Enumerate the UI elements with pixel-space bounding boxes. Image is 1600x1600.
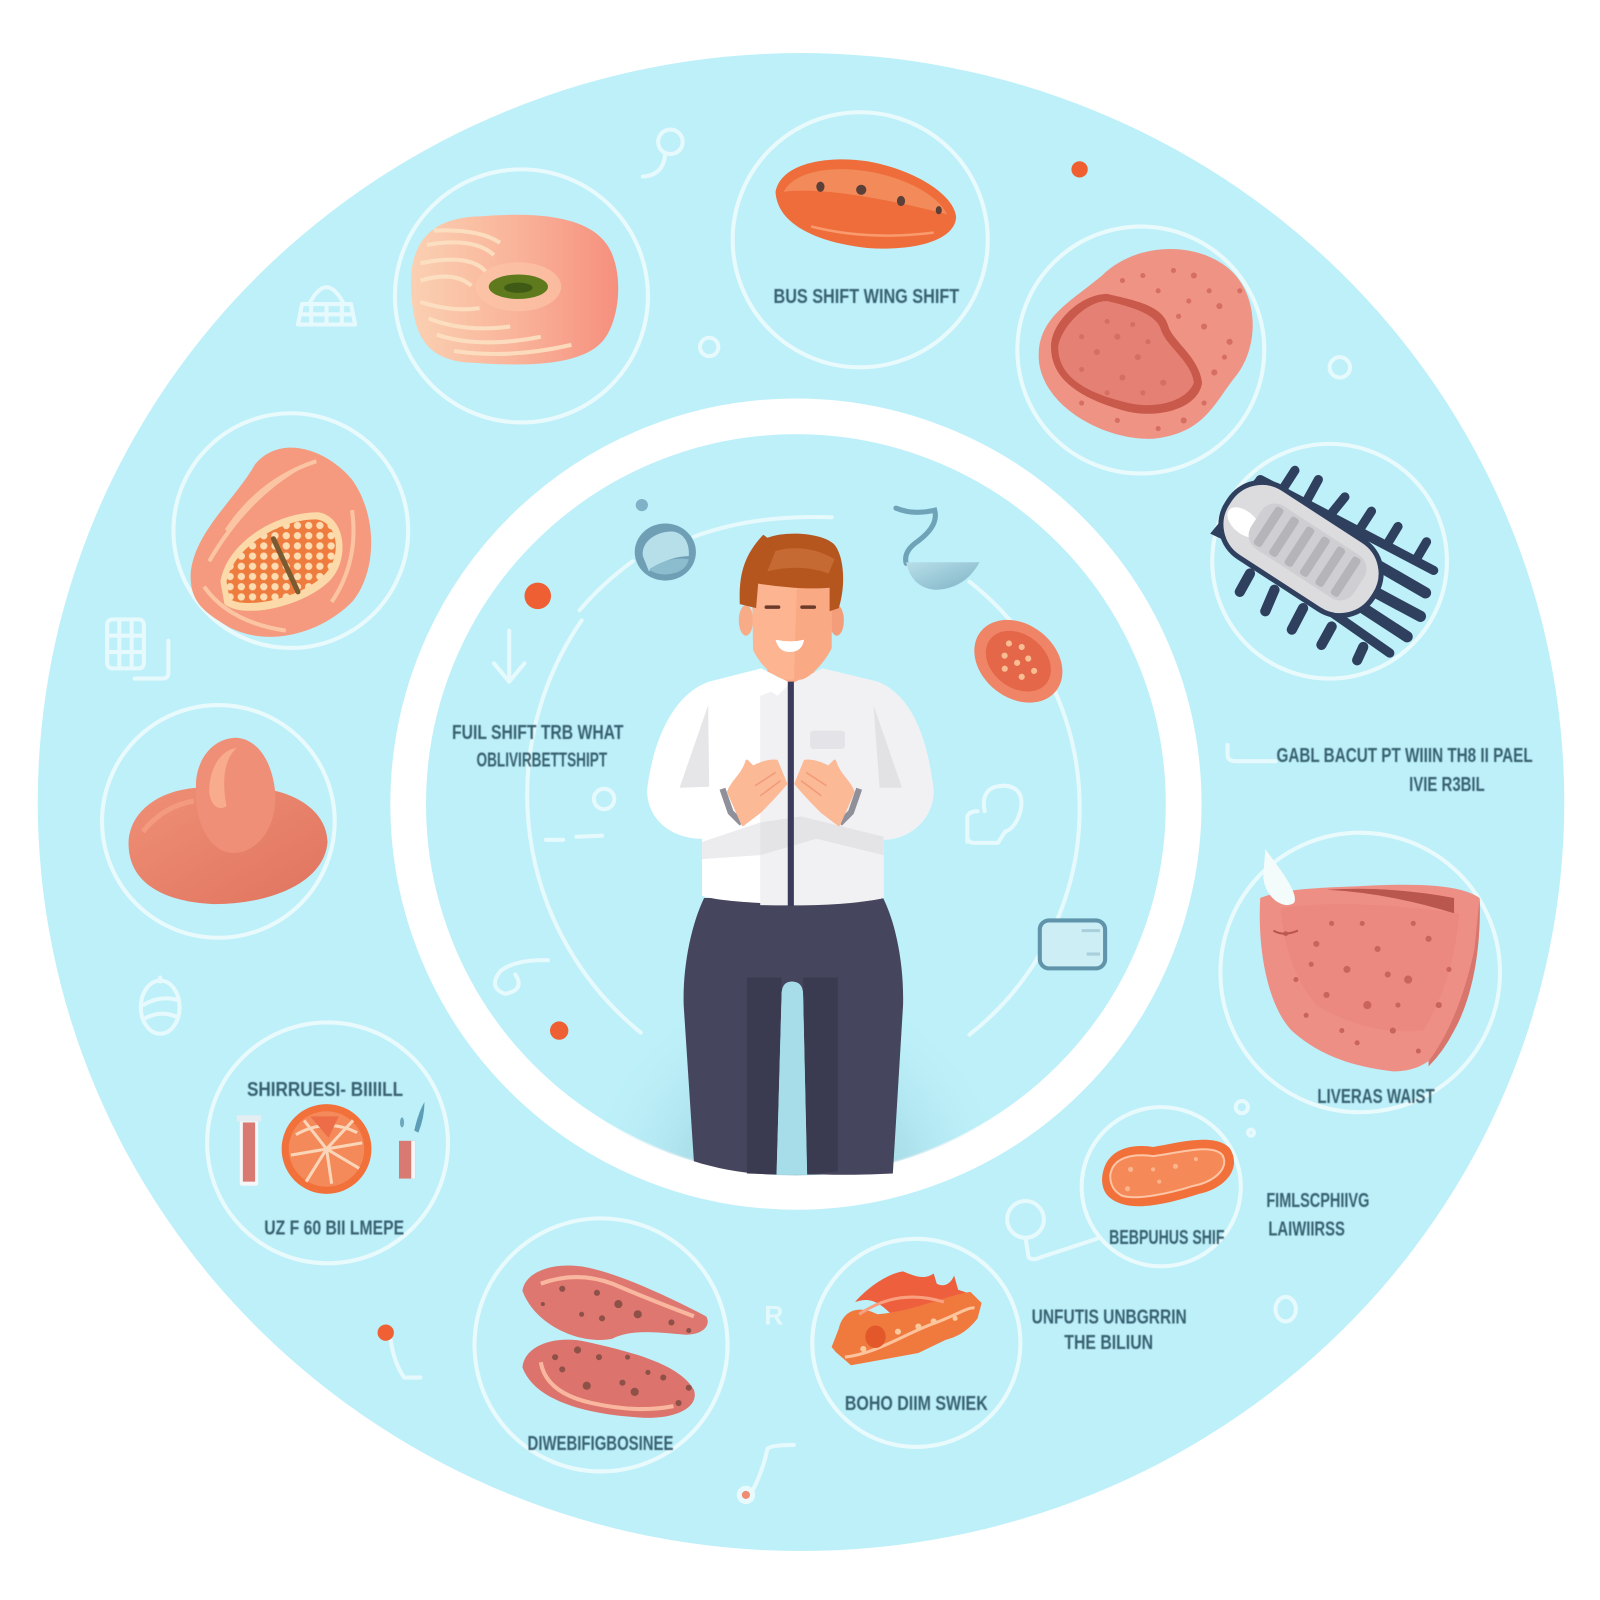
icon: pin bottom: [737, 1445, 794, 1504]
icon: left tube: [237, 1115, 261, 1186]
organ: mound: [129, 738, 328, 904]
text block: lower centre: [1032, 1306, 1187, 1354]
text block: centre left: OBLIVIRBETTSHIPT: [477, 749, 608, 771]
icon: hook bowl: [896, 508, 980, 590]
head: [739, 534, 844, 680]
icon: bubbles right bottom: [1236, 1101, 1254, 1136]
icon: orange pin lower left: [378, 1324, 420, 1378]
floor shadow: [610, 1086, 982, 1176]
person: [610, 534, 982, 1176]
icon: oval ring: [1276, 1297, 1296, 1321]
icon: orange dot: [524, 583, 551, 609]
neck: [767, 653, 814, 696]
text block: right: IVIE R3BIL: [1409, 774, 1485, 796]
inner leg shading: [747, 978, 838, 1174]
panel: mound organ: [102, 705, 335, 938]
decorative icons outer ring: [107, 130, 1350, 1504]
label bottom: UZ F 60 BII LMEPE: [264, 1218, 404, 1240]
text block: lower right: [1266, 1190, 1369, 1241]
panel: top left organ: [395, 169, 648, 422]
leg gap: [777, 982, 807, 1174]
mouth: [776, 640, 804, 652]
icon: grid chart: [107, 619, 168, 679]
label: DIWEBIFIGBOSINEE: [528, 1433, 673, 1455]
organ: round slice: [282, 1104, 371, 1194]
icon: letter: R: [764, 1300, 783, 1330]
text block: right: [1277, 745, 1533, 796]
icon: dashes: [546, 836, 602, 840]
organ: frilled tissue: [832, 1271, 982, 1365]
panel: two lobes: [474, 1218, 728, 1471]
icon: small organ slice: [958, 603, 1079, 720]
text block: lower right: FIMLSCPHIIVG: [1266, 1190, 1369, 1212]
icon: rounded box: [1040, 920, 1105, 968]
organ: cut tissue block: [1260, 849, 1480, 1071]
icon: basket: [298, 287, 355, 324]
icon: small ring: [594, 789, 614, 809]
panel: citrus slice with tubes: [207, 1022, 448, 1263]
panel: left organ: [173, 413, 408, 648]
icon: orange dot lower: [550, 1021, 568, 1040]
label: BOHO DIIM SWIEK: [845, 1393, 988, 1415]
right hand: [796, 761, 859, 824]
icon: ear outline: [967, 786, 1021, 843]
icon: small blue dot: [636, 499, 648, 511]
pants: [684, 897, 903, 1175]
panel: right device: [1206, 444, 1447, 679]
organ: ribbed capsule: [1206, 468, 1434, 660]
text block: lower centre: UNFUTIS UNBGRRIN: [1032, 1306, 1187, 1328]
icon: right tube and pen: [399, 1102, 424, 1179]
label: BEBPUHUS SHIF: [1109, 1227, 1224, 1249]
inner orbit arcs: [527, 517, 1080, 1035]
text block: centre left: [452, 722, 624, 771]
panel: frilled organ: [812, 1239, 1020, 1447]
zipper: [788, 682, 794, 906]
panel: right top organ: [1017, 227, 1264, 473]
icon: small ring top: [700, 338, 718, 356]
panel: top organ: [733, 112, 988, 367]
shirt torso and arms: [647, 668, 934, 905]
icon: leaf: [141, 978, 180, 1034]
icon: orange dot top right: [1071, 161, 1088, 178]
text block: lower right: LAIWIIRSS: [1268, 1219, 1345, 1241]
text block: centre left: FUIL SHIFT TRB WHAT: [452, 722, 624, 744]
label: LIVERAS WAIST: [1317, 1086, 1435, 1108]
organ: bean: [1102, 1140, 1234, 1206]
organ: almond: [776, 159, 956, 249]
label: BUS SHIFT WING SHIFT: [773, 286, 960, 308]
icon: pin top: [643, 130, 683, 177]
icon: hook: [495, 960, 548, 994]
organ: lower lobe: [522, 1340, 695, 1418]
inner icons: [494, 499, 1105, 1040]
icon: bracket line: [1228, 745, 1276, 761]
organ: egg section: [191, 448, 371, 637]
icon: small ring right: [1330, 357, 1350, 378]
panel: right lower organ: [1220, 833, 1500, 1112]
left hand: [722, 761, 786, 824]
text block: lower centre: THE BILIUN: [1064, 1332, 1153, 1354]
organ: upper lobe: [522, 1265, 708, 1340]
icon: blue ball: [635, 523, 696, 581]
icon: down arrow: [494, 631, 524, 682]
label top: SHIRRUESI- BIIIILL: [247, 1079, 403, 1101]
icon: connector ring: [1007, 1201, 1097, 1259]
organ: tissue with green core: [411, 215, 618, 364]
eyes: [766, 605, 814, 609]
white central ring: [408, 416, 1184, 1192]
panel: small bean organ: [1082, 1107, 1241, 1266]
organ: textured lump: [1039, 249, 1253, 439]
